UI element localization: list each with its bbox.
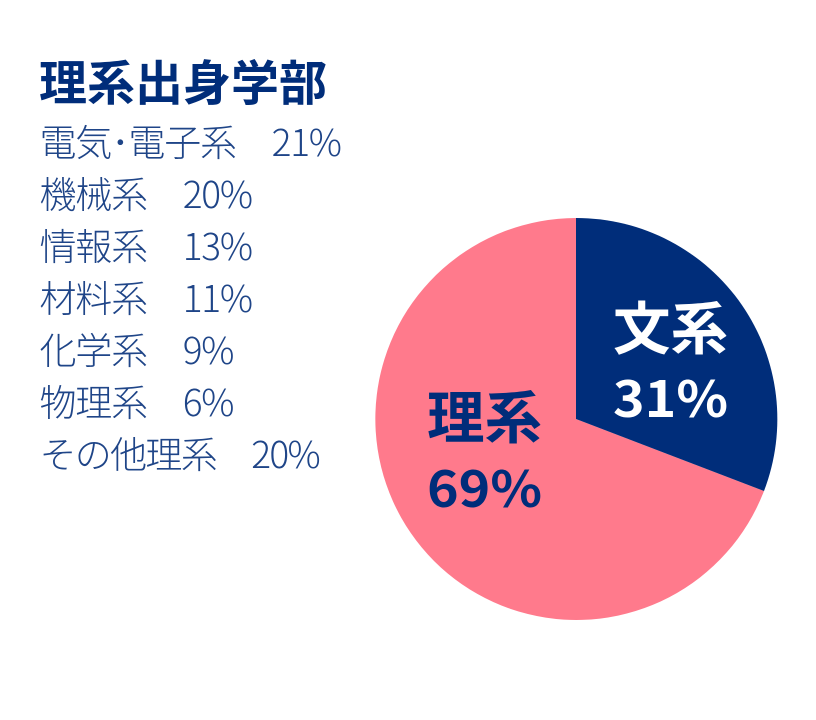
slice: science 69% bbox=[375, 218, 764, 620]
item: materials: 材料系 11% bbox=[40, 269, 252, 323]
label: science bbox=[427, 373, 542, 522]
item: physics: 物理系 6% bbox=[40, 373, 233, 427]
item: mechanical: 機械系 20% bbox=[40, 165, 252, 219]
label: humanities: 31% bbox=[613, 360, 728, 432]
label: humanities: 文系 bbox=[613, 284, 728, 366]
label: science: 69% bbox=[427, 450, 542, 522]
item: other: その他理系 20% bbox=[40, 425, 319, 479]
title: 理系出身学部 bbox=[39, 44, 327, 114]
label: humanities bbox=[613, 284, 728, 432]
item: electrical: 電気･電子系 21% bbox=[40, 113, 341, 167]
breakdown list bbox=[40, 113, 341, 479]
item: chemistry: 化学系 9% bbox=[40, 321, 233, 375]
label: science: 理系 bbox=[427, 373, 542, 455]
item: information: 情報系 13% bbox=[40, 217, 252, 271]
slice: humanities 31% bbox=[576, 218, 777, 491]
